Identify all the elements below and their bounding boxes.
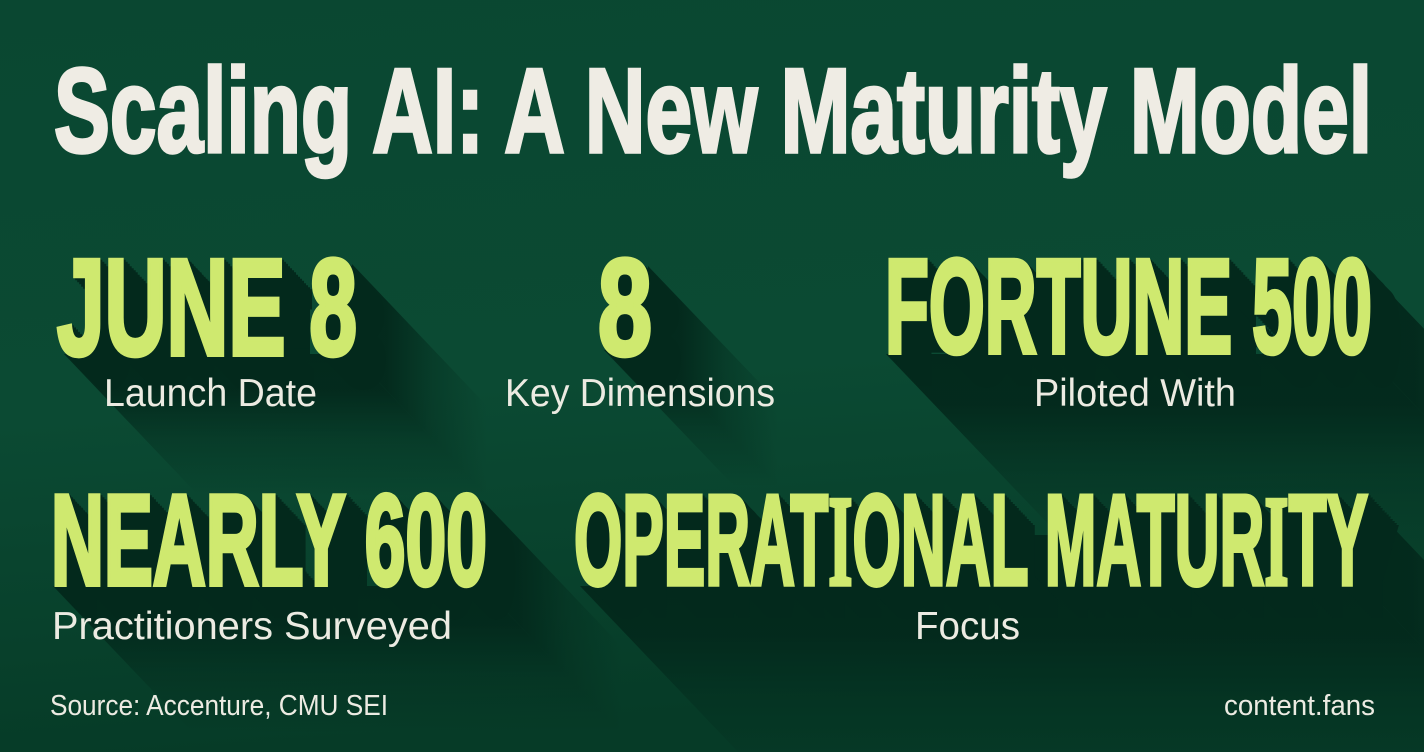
stat: key dimensions <box>505 231 775 415</box>
label: Launch Date: Launch Date <box>104 372 317 415</box>
label: Key Dimensions: Key Dimensions <box>505 372 775 415</box>
stat: piloted with <box>885 231 1372 415</box>
shadow: Nearly 600 <box>53 500 622 733</box>
stat: key dimensions: 8 <box>598 231 652 384</box>
label: Piloted With: Piloted With <box>1034 372 1236 415</box>
label: Practitioners Surveyed: Practitioners Surveyed <box>52 605 452 648</box>
shadow: Operational Maturity <box>580 497 1424 752</box>
shadow: 8 <box>604 266 778 486</box>
stat: practitioners surveyed <box>51 468 487 648</box>
text: JUNE 8 <box>57 231 357 384</box>
shadow: Fortune 500 <box>886 268 1424 553</box>
source note: Source: Accenture, CMU SEI <box>50 690 388 722</box>
site credit: content.fans <box>1224 690 1375 722</box>
shadow: June 8 <box>64 264 487 496</box>
label: Focus: Focus <box>915 605 1020 648</box>
stat: launch date <box>57 231 357 415</box>
stat: focus <box>574 468 1368 648</box>
